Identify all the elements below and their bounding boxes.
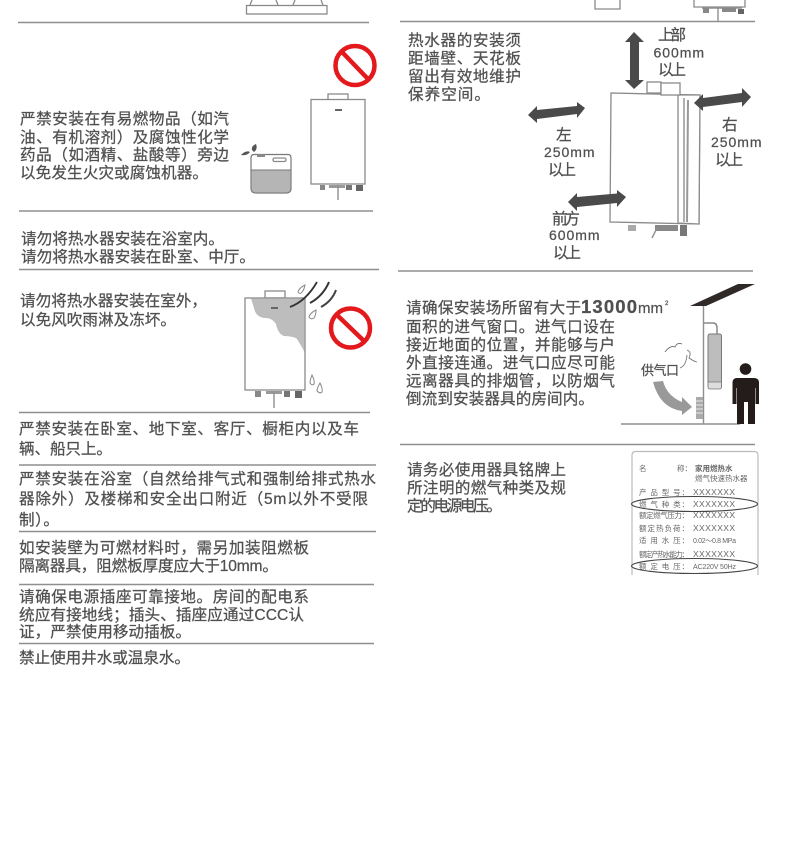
text: do not install outdoors: 请勿将热水器安装在室外， xyxy=(20,292,207,310)
icon: rain streaks and drops xyxy=(290,282,336,393)
arrow: top clearance xyxy=(625,32,644,89)
text: power socket grounding xyxy=(19,588,309,641)
nameplate rows: XXXXXXX xyxy=(693,510,735,520)
text: forbidden bathroom and stairs: 器除外）及楼梯和安全出口附近（5m以外不受限 xyxy=(19,490,368,508)
nameplate highlight ovals xyxy=(632,496,758,574)
arrow: right clearance xyxy=(694,88,751,111)
text: do not install outdoors xyxy=(20,292,207,329)
text: clearance instructions: 热水器的安装须 xyxy=(408,32,521,50)
nameplate rows: 燃气快速热水器 xyxy=(695,473,748,483)
nameplate rows: 0.02～0.8 MPa xyxy=(693,538,736,545)
text: power socket grounding: 统应有接地线；插头、插座应通过CCC认 xyxy=(19,605,304,624)
icon: person xyxy=(732,363,759,424)
nameplate xyxy=(632,452,758,575)
text: do not install outdoors: 以免风吹雨淋及冻坏。 xyxy=(20,311,176,329)
nameplate rows: 适 用 水 压： xyxy=(639,535,689,545)
text: flame retardant board: 如安装壁为可燃材料时，需另加装阻燃板 xyxy=(19,539,309,557)
label: front clearance: 600mm xyxy=(549,227,600,243)
text: forbidden rooms and vehicles: 辆、船只上。 xyxy=(19,440,112,458)
diagram: wall-mounted heater with flue xyxy=(704,323,722,389)
text: power socket grounding: 证，严禁使用移动插板。 xyxy=(19,623,191,641)
icon: airflow arrow xyxy=(653,381,692,415)
text: forbidden bathroom and stairs: 制）。 xyxy=(19,511,59,529)
diagram: water heater perspective xyxy=(610,82,700,238)
diagram: wall, roof and ground xyxy=(621,284,755,424)
text: flammables warning xyxy=(20,110,229,182)
label: left clearance: 左 xyxy=(556,126,572,144)
text: forbidden bathroom and stairs: 严禁安装在浴室（自然给排气式和强制给排式热水 xyxy=(19,470,376,488)
label: left clearance xyxy=(544,126,595,179)
text: check nameplate: 定的电源电压。 xyxy=(407,497,502,515)
icon: prohibition sign, outdoors xyxy=(331,308,370,348)
diagram: air inlet vent xyxy=(696,397,703,419)
text: do not install in bathroom or bedroom: 请勿将热水器安装在浴室内。 xyxy=(21,230,224,248)
label: top clearance xyxy=(654,26,704,79)
text: ventilation instructions xyxy=(406,296,669,408)
icon: cropped box and heater, top right xyxy=(595,0,745,22)
label: top clearance: 以上 xyxy=(658,61,686,79)
text: clearance instructions: 距墙壁、天花板 xyxy=(408,50,521,68)
text: forbidden rooms and vehicles xyxy=(19,420,359,458)
label: right clearance: 右 xyxy=(722,116,738,134)
text: ventilation instructions: 远离器具的排烟管，以防烟气 xyxy=(406,372,615,390)
text: forbidden rooms and vehicles: 严禁安装在卧室、地下室、客厅、橱柜内以及车 xyxy=(19,420,359,438)
nameplate rows: XXXXXXX xyxy=(693,487,735,497)
text: ventilation instructions: 2 xyxy=(665,301,669,307)
label: left clearance: 250mm xyxy=(544,144,595,160)
text: flammables warning: 油、有机溶剂）及腐蚀性化学 xyxy=(20,128,229,146)
text: no well or hot spring water: 禁止使用井水或温泉水。 xyxy=(19,649,190,667)
text: do not install in bathroom or bedroom xyxy=(21,230,255,266)
label: right clearance xyxy=(711,116,762,169)
text: flammables warning: 药品（如酒精、盐酸等）旁边 xyxy=(20,146,229,164)
arrow: front clearance xyxy=(568,190,626,211)
text: check nameplate: 所注明的燃气种类及规 xyxy=(407,479,566,497)
nameplate rows: 家用燃热水 xyxy=(695,463,733,473)
label: front clearance: 前方 xyxy=(552,210,580,228)
text: ventilation instructions: mm xyxy=(638,300,663,317)
nameplate rows: AC220V 50Hz xyxy=(693,564,736,571)
nameplate rows: 称： xyxy=(677,463,692,473)
icon: cropped appliance base, top left xyxy=(246,0,327,14)
text: ventilation instructions: 外直接连通。进气口应尽可能 xyxy=(406,353,615,372)
text: power socket grounding: 请确保电源插座可靠接地。房间的配电系 xyxy=(19,588,309,606)
text: flame retardant board: 隔离器具，阻燃板厚度应大于10mm。 xyxy=(19,556,278,575)
text: ventilation instructions: 请确保安装场所留有大于 xyxy=(406,299,581,317)
arrow: left clearance xyxy=(528,102,585,123)
nameplate rows xyxy=(639,463,748,571)
nameplate rows: 额定产热水能力： xyxy=(639,549,689,559)
nameplate rows: 名 xyxy=(639,463,646,473)
text: flame retardant board xyxy=(19,539,309,575)
nameplate rows: 额定热负荷： xyxy=(639,523,689,533)
nameplate rows: 额 定 电 压： xyxy=(639,561,689,571)
nameplate rows: 燃 气 种 类： xyxy=(639,499,689,509)
text: ventilation instructions: 倒流到安装器具的房间内。 xyxy=(406,390,594,408)
label: top clearance: 600mm xyxy=(654,44,704,60)
nameplate rows: XXXXXXX xyxy=(693,523,735,533)
text: do not install in bathroom or bedroom: 请勿将热水器安装在卧室、中厅。 xyxy=(21,248,255,266)
icon: water heater, flammables xyxy=(311,94,365,200)
label: front clearance: 以上 xyxy=(553,244,581,262)
text: flammables warning: 以免发生火灾或腐蚀机器。 xyxy=(20,164,208,182)
text: clearance instructions xyxy=(408,32,521,104)
label: air supply with cloud: 供气口 xyxy=(641,363,679,378)
nameplate rows: 产 品 型 号： xyxy=(639,487,689,497)
text: ventilation instructions: 13000 xyxy=(581,296,637,317)
label: front clearance xyxy=(549,210,600,262)
text: check nameplate xyxy=(407,461,566,515)
text: ventilation instructions: 面积的进气窗口。进气口设在 xyxy=(406,318,615,336)
nameplate rows: 额定燃气压力： xyxy=(639,510,689,520)
text: clearance instructions: 留出有效地维护 xyxy=(408,68,521,86)
icon: chemical jerrycan with splash xyxy=(241,144,291,193)
nameplate rows: XXXXXXX xyxy=(693,499,735,509)
label: right clearance: 250mm xyxy=(711,134,762,150)
nameplate rows: XXXXXXX xyxy=(693,549,735,559)
text: clearance instructions: 保养空间。 xyxy=(408,86,490,104)
label: right clearance: 以上 xyxy=(715,151,743,169)
label: top clearance: 上部 xyxy=(658,26,686,44)
text: flammables warning: 严禁安装在有易燃物品（如汽 xyxy=(20,110,229,128)
label: air supply with cloud xyxy=(641,343,697,378)
text: check nameplate: 请务必使用器具铭牌上 xyxy=(407,461,566,479)
text: ventilation instructions: 接近地面的位置，并能够与户 xyxy=(406,336,615,354)
icon: prohibition sign, flammables xyxy=(336,46,374,85)
icon: water heater in rain xyxy=(245,291,305,408)
label: left clearance: 以上 xyxy=(548,161,576,179)
text: forbidden bathroom and stairs xyxy=(19,470,376,529)
